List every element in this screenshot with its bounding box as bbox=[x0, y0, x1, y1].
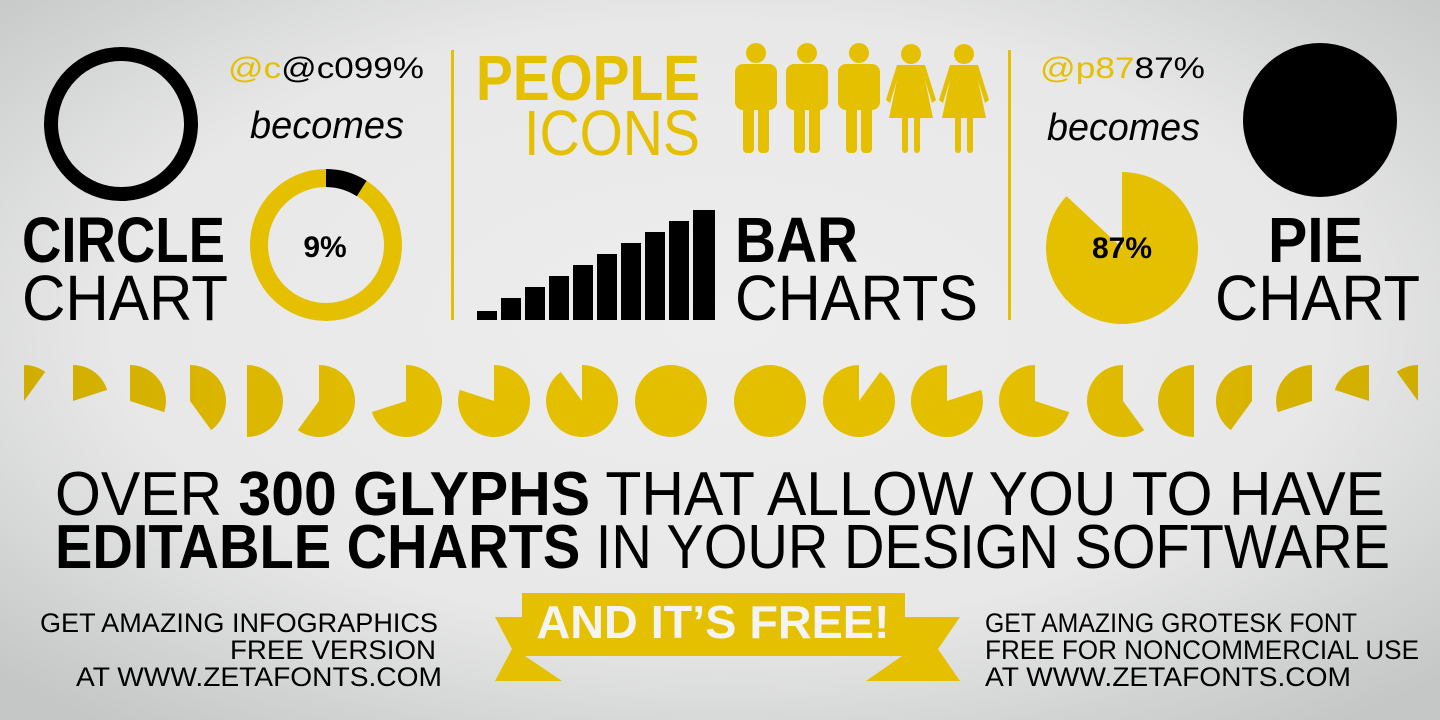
headline bbox=[55, 460, 1390, 582]
label: @c@c099%: @c @c099% bbox=[228, 52, 424, 85]
heading: circle chart: CIRCLE bbox=[22, 204, 225, 276]
chart: donut 9% bbox=[259, 169, 393, 312]
heading: people icons bbox=[476, 42, 700, 169]
text: bottom right: GET AMAZING GROTESK FONT bbox=[985, 608, 1357, 638]
heading: circle chart: CHART bbox=[22, 262, 228, 334]
heading: people icons: ICONS bbox=[524, 97, 700, 169]
icons: people bbox=[735, 43, 989, 153]
text: bottom right: FREE FOR NONCOMMERCIAL USE bbox=[985, 635, 1419, 665]
chart: pie 87% bbox=[1046, 172, 1198, 324]
text: bottom left: GET AMAZING INFOGRAPHICS bbox=[40, 608, 438, 638]
heading: pie chart: CHART bbox=[1215, 262, 1420, 334]
chart: donut 9%: 9% bbox=[303, 231, 347, 264]
heading: pie chart bbox=[1215, 204, 1420, 334]
text: bottom right: AT WWW.ZETAFONTS.COM bbox=[985, 662, 1351, 692]
row: pie progression bbox=[24, 365, 1418, 437]
chart: pie 87%: 87% bbox=[1092, 232, 1152, 265]
heading: bar charts: CHARTS bbox=[735, 262, 978, 334]
headline: EDITABLE CHARTS IN YOUR DESIGN SOFTWARE bbox=[55, 513, 1390, 582]
label: becomes left: becomes bbox=[250, 105, 404, 147]
headline: OVER 300 GLYPHS THAT ALLOW YOU TO HAVE bbox=[55, 460, 1385, 529]
text: bottom left: AT WWW.ZETAFONTS.COM bbox=[76, 662, 442, 692]
chart: bar chart bbox=[477, 210, 715, 320]
label: becomes right: becomes bbox=[1047, 107, 1200, 149]
label: @p8787%: @p87 87% bbox=[1040, 52, 1205, 85]
heading: bar charts: BAR bbox=[735, 204, 858, 276]
ribbon: and it's free: AND IT’S FREE! bbox=[536, 596, 890, 648]
heading: pie chart: PIE bbox=[1268, 204, 1363, 276]
text: bottom right bbox=[985, 608, 1419, 692]
icon: circle ring bbox=[51, 54, 191, 194]
heading: bar charts bbox=[735, 204, 978, 334]
text: bottom left bbox=[40, 608, 442, 692]
text: bottom left: FREE VERSION bbox=[230, 635, 436, 665]
icon: black circle bbox=[1243, 43, 1397, 197]
ribbon: and it's free bbox=[495, 593, 960, 681]
heading: people icons: PEOPLE bbox=[476, 42, 700, 114]
heading: circle chart bbox=[22, 204, 228, 334]
